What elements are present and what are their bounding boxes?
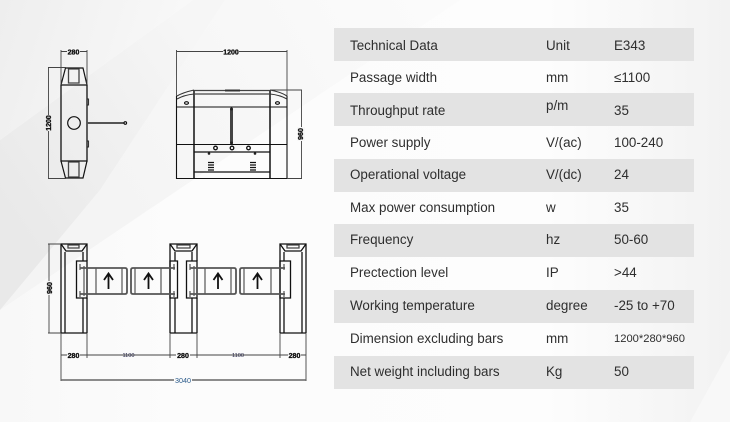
- dimension: 280 right: 280: [289, 353, 300, 360]
- dimension: 1100 left: 1100: [122, 353, 135, 359]
- row: dimension excluding bars: [350, 331, 685, 346]
- row: power supply: V/(ac): [546, 135, 582, 150]
- row: protection level: [350, 265, 637, 280]
- swing gate 3: [190, 264, 236, 297]
- row: technical data header: Unit: [546, 38, 570, 53]
- row: throughput rate: [334, 93, 694, 126]
- drawing: side view: [45, 48, 127, 178]
- row: operational voltage: Operational voltage: [350, 167, 466, 182]
- row: working temperature: -25 to +70: [614, 298, 675, 313]
- dimension: 280 right: [288, 351, 301, 360]
- dimension: 1100 right: 1100: [232, 353, 244, 359]
- post 2: [170, 244, 197, 333]
- row: throughput rate: Throughput rate: [350, 103, 445, 118]
- icon: arrow: [253, 274, 262, 289]
- row: net weight including bars: 50: [614, 364, 629, 379]
- row: frequency: 50-60: [614, 232, 648, 247]
- post 1: [61, 244, 87, 333]
- row: frequency: [334, 224, 694, 257]
- icon: arrow: [144, 274, 153, 289]
- row: max power consumption: [350, 200, 629, 215]
- dimension: 960: 960: [47, 282, 54, 294]
- row: passage width: Passage width: [350, 70, 437, 85]
- row: passage width: [350, 70, 650, 85]
- row: net weight including bars: Net weight including bars: [350, 364, 500, 379]
- dimension: 960 height: 960: [298, 128, 305, 140]
- drawing: top view with swing gates: [46, 244, 306, 385]
- row: technical data header: [334, 28, 694, 61]
- dimension: 3040: 3040: [175, 376, 191, 385]
- row: operational voltage: 24: [614, 167, 629, 182]
- row: working temperature: [334, 290, 694, 323]
- row: frequency: hz: [546, 232, 560, 247]
- row: operational voltage: [334, 159, 694, 192]
- dimension: 280: 280: [68, 50, 79, 56]
- dimension: 1200 height: 1200: [46, 115, 53, 131]
- row: max power consumption: w: [546, 200, 556, 215]
- row: power supply: [350, 135, 663, 150]
- swing gate 1: [80, 264, 127, 297]
- row: throughput rate: p/m: [546, 98, 568, 113]
- brackets: [76, 261, 290, 298]
- row: passage width: ≤1100: [614, 70, 650, 85]
- post 3: [280, 244, 306, 333]
- dimension: 280 left: 280: [68, 353, 79, 360]
- dimension: 1200 width: 1200: [223, 50, 239, 56]
- dimension: 280 left: [67, 351, 80, 360]
- row: passage width: mm: [546, 70, 568, 85]
- row: protection level: >44: [614, 265, 637, 280]
- row: net weight including bars: Kg: [546, 364, 562, 379]
- row: technical data header: E343: [614, 38, 645, 53]
- row: working temperature: degree: [546, 298, 588, 313]
- row: max power consumption: 35: [614, 200, 629, 215]
- row: protection level: Prectection level: [350, 265, 448, 280]
- row: max power consumption: Max power consumption: [350, 200, 495, 215]
- row: dimension excluding bars: mm: [546, 331, 568, 346]
- dimension: 280 middle: [176, 351, 190, 360]
- swing gate 2: [131, 264, 175, 297]
- row: operational voltage: V/(dc): [546, 167, 582, 182]
- row: throughput rate: 35: [614, 103, 629, 118]
- icon: arrow: [214, 274, 222, 289]
- technical drawings: [46, 49, 307, 385]
- icon: arrow: [104, 274, 113, 289]
- drawing: front view: [176, 47, 305, 179]
- panel: technical data table: [334, 28, 694, 389]
- row: technical data header: Technical Data: [350, 38, 438, 53]
- row: dimension excluding bars: 1200*280*960: [614, 333, 685, 345]
- row: protection level: IP: [546, 265, 559, 280]
- row: dimension excluding bars: Dimension excluding bars: [350, 331, 503, 346]
- row: power supply: Power supply: [350, 135, 430, 150]
- swing gate 4: [240, 264, 285, 297]
- dimension: 280 middle: 280: [177, 353, 189, 360]
- row: working temperature: Working temperature: [350, 298, 475, 313]
- row: power supply: 100-240: [614, 135, 663, 150]
- row: frequency: Frequency: [350, 232, 413, 247]
- row: net weight including bars: [334, 356, 694, 389]
